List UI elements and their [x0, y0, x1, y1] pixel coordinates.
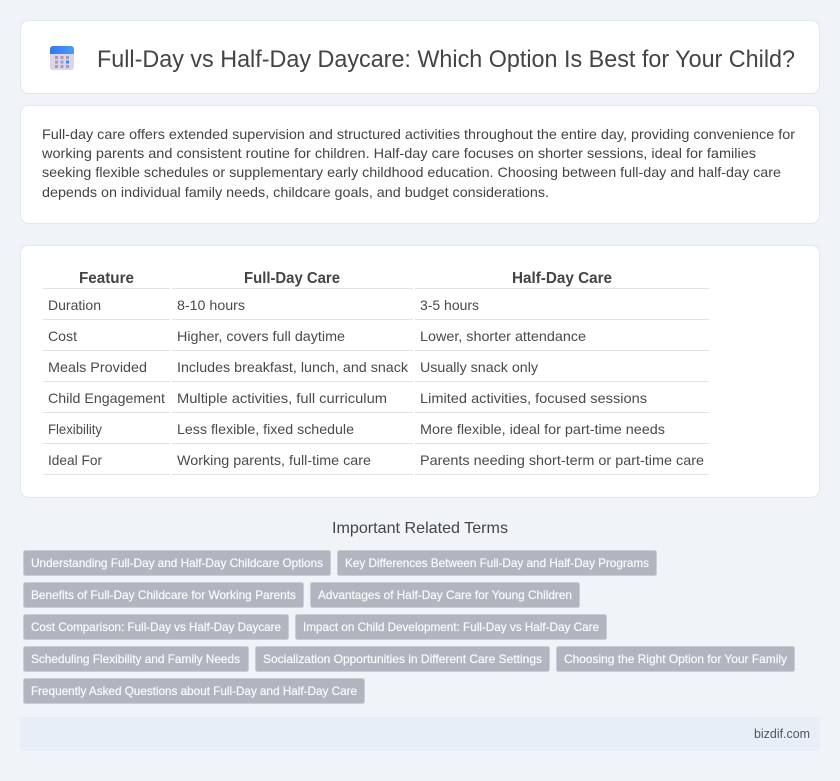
row: cost: [48, 328, 586, 344]
tag: Key Differences Between Full-Day and Half-Day Programs: [345, 556, 649, 570]
panel: description: [20, 106, 820, 224]
tag: Advantages of Half-Day Care for Young Children: [318, 588, 572, 602]
row: ideal for: [48, 452, 704, 468]
tag: [256, 646, 550, 672]
row: duration: Duration: [48, 297, 101, 313]
icon: calendar: [50, 46, 74, 70]
row: flexibility: More flexible, ideal for part-time needs: [420, 421, 665, 437]
tag: Choosing the Right Option for Your Family: [564, 652, 787, 666]
tag: [310, 582, 580, 608]
tag: [24, 582, 304, 608]
tag: Understanding Full-Day and Half-Day Childcare Options: [31, 556, 323, 570]
table header: Half-Day Care: [512, 270, 612, 287]
tag: Socialization Opportunities in Different Care Settings: [263, 652, 542, 666]
row: child engagement: Limited activities, focused sessions: [420, 390, 647, 406]
row: cost: Lower, shorter attendance: [420, 328, 586, 344]
row: cost: Higher, covers full daytime: [177, 328, 345, 344]
row: duration: 8-10 hours: [177, 297, 245, 313]
footer: [20, 717, 820, 751]
table header: Full-Day Care: [244, 270, 340, 287]
row: cost: Cost: [48, 328, 77, 344]
tag: Frequently Asked Questions about Full-Day and Half-Day Care: [31, 684, 357, 698]
row: duration: [48, 297, 479, 313]
row: child engagement: [48, 390, 647, 406]
text block: description: depends on individual family needs, childcare goals, and budget considerations.: [42, 184, 549, 200]
tag: Benefits of Full-Day Childcare for Working Parents: [31, 588, 296, 602]
row: flexibility: Flexibility: [48, 421, 102, 437]
tag: Cost Comparison: Full-Day vs Half-Day Daycare: [31, 620, 281, 634]
row: meals provided: Includes breakfast, lunch, and snack: [177, 359, 409, 375]
title: Full-Day vs Half-Day Daycare: Which Option Is Best for Your Child?: [97, 46, 795, 73]
panel: title header: [20, 20, 820, 94]
row: child engagement: Multiple activities, full curriculum: [177, 390, 387, 406]
footer text: bizdif.com: [754, 727, 810, 741]
text block: description: Full-day care offers extended supervision and structured activities throughout the entire day, providing convenience for: [42, 126, 795, 142]
row: ideal for: Parents needing short-term or part-time care: [420, 452, 704, 468]
row: child engagement: Child Engagement: [48, 390, 165, 406]
row: meals provided: Usually snack only: [420, 359, 538, 375]
related term tags: [24, 550, 794, 704]
tag: [24, 614, 288, 640]
tag: [296, 614, 606, 640]
tag: Impact on Child Development: Full-Day vs Half-Day Care: [303, 620, 599, 634]
row: meals provided: Meals Provided: [48, 359, 147, 375]
tag: [556, 646, 794, 672]
text block: description: working parents and consistent routine for children. Half-day care focuses on shorter sessions, ideal for families: [41, 145, 756, 161]
tag: Scheduling Flexibility and Family Needs: [31, 652, 240, 666]
tag: [338, 550, 656, 576]
tag: [24, 678, 364, 704]
row: flexibility: [48, 421, 665, 437]
tag: [24, 550, 330, 576]
row: flexibility: Less flexible, fixed schedule: [177, 421, 354, 437]
heading: important related terms: Important Related Terms: [332, 520, 508, 537]
table header: Feature: [79, 270, 134, 287]
row: ideal for: Ideal For: [48, 452, 102, 468]
row: ideal for: Working parents, full-time care: [177, 452, 371, 468]
text block: description: seeking flexible schedules or supplementary early childhood education. Choosing between full-day and half-day care: [42, 164, 781, 180]
text block: description: [41, 126, 795, 200]
row: meals provided: [48, 359, 538, 375]
row: duration: 3-5 hours: [420, 297, 479, 313]
panel: comparison table: [20, 246, 820, 498]
tag: [24, 646, 248, 672]
table header: [79, 270, 612, 287]
